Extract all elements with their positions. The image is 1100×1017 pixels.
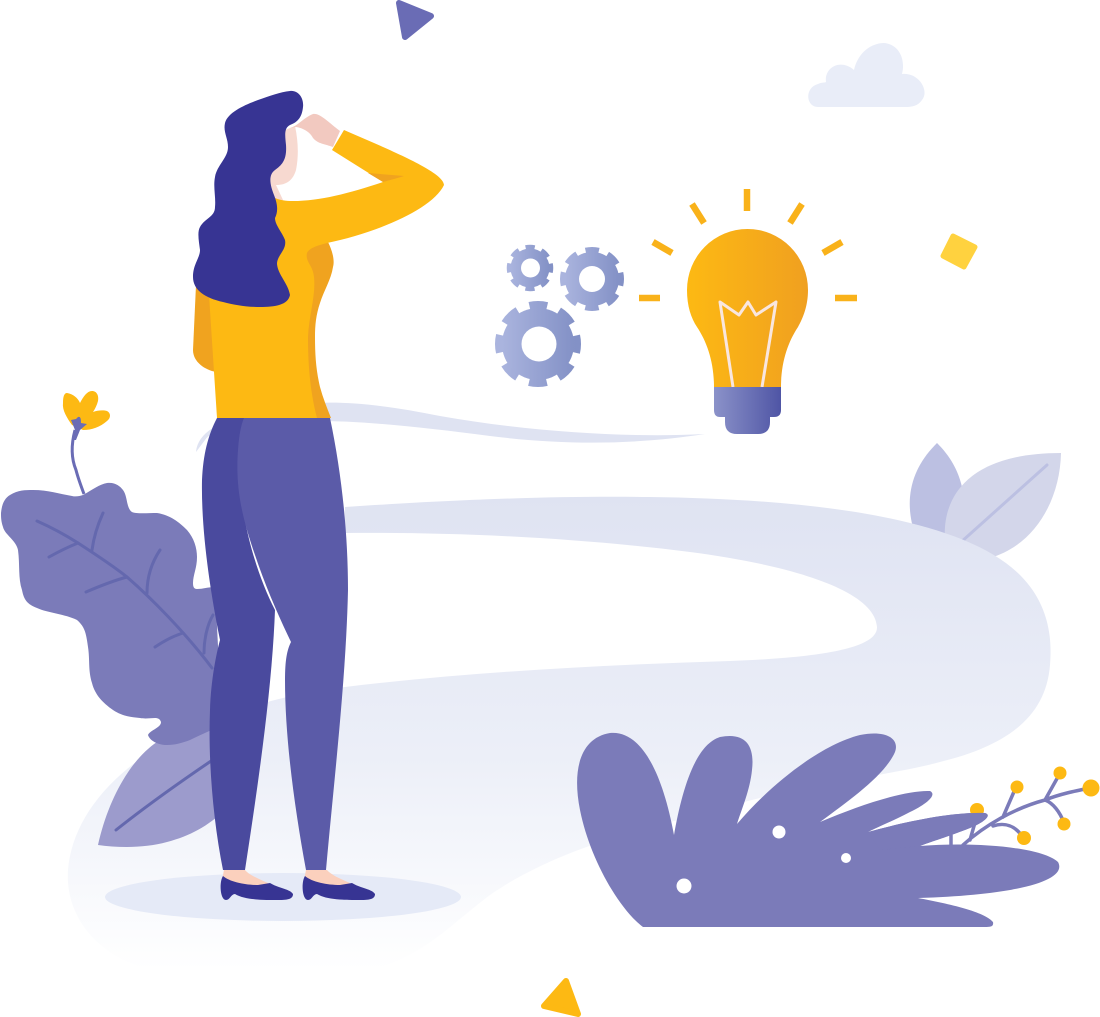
right foot — [304, 870, 354, 892]
lower leaf vein — [116, 759, 214, 830]
leaf veins — [37, 513, 213, 668]
medium gear — [564, 251, 620, 307]
back leaf — [910, 443, 962, 540]
sleeve fold — [368, 173, 404, 182]
bulb base — [714, 387, 781, 434]
decorative triangle bottom — [544, 981, 578, 1014]
light rays — [639, 189, 857, 298]
right leg — [237, 418, 348, 870]
ground shadow — [105, 873, 461, 921]
torso side shade — [300, 242, 334, 418]
flower petals — [63, 391, 110, 430]
right leaves — [910, 443, 1061, 558]
hair — [193, 91, 303, 307]
bush frond over branch — [868, 813, 988, 850]
sweater — [209, 130, 444, 418]
small gear — [510, 248, 550, 288]
hand — [290, 114, 340, 147]
leaf vein — [960, 465, 1047, 543]
filament — [720, 302, 776, 387]
berry branch — [951, 766, 1100, 845]
large gear — [501, 307, 575, 381]
neck — [266, 126, 298, 205]
big left leaf — [1, 483, 222, 745]
bush dots — [676, 826, 851, 894]
cloud — [808, 43, 925, 107]
berries — [970, 766, 1100, 845]
left foot — [222, 870, 272, 892]
flower calyx — [71, 417, 87, 440]
flower — [63, 391, 110, 494]
left shoe — [221, 876, 293, 900]
bush — [577, 733, 1059, 927]
far sleeve shade — [193, 285, 216, 372]
decorative diamond — [943, 236, 975, 267]
front leaf — [945, 453, 1061, 558]
woman — [193, 91, 444, 900]
right shoe — [303, 876, 375, 900]
flower stem — [72, 430, 84, 494]
gears — [501, 248, 620, 381]
decorative triangle top — [399, 3, 431, 37]
light bulb — [639, 189, 857, 434]
background path — [68, 403, 1051, 970]
lower left leaf — [98, 720, 225, 847]
bulb glass — [687, 229, 808, 387]
left leg — [202, 418, 275, 870]
